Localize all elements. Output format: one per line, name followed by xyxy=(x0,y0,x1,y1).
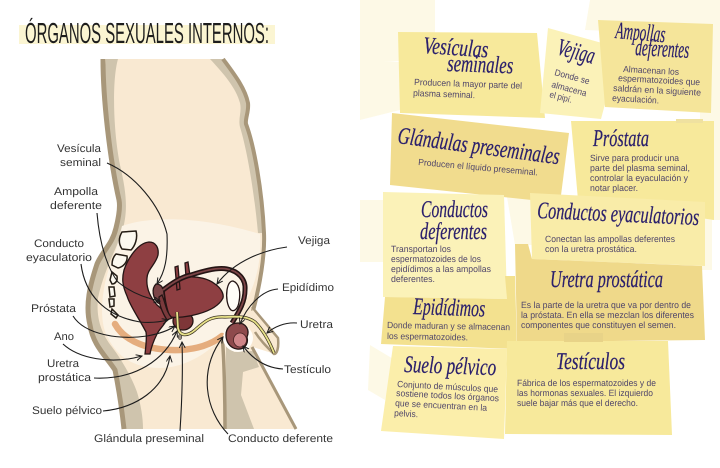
epididymis and testicle xyxy=(226,323,248,349)
note: Vesículas seminales: seminales xyxy=(447,51,514,79)
note: Vejiga: el pipí. xyxy=(548,89,573,105)
note: Vejiga xyxy=(540,28,620,119)
note: Vesículas seminales: plasma seminal. xyxy=(413,88,475,100)
diagram labels: seminal xyxy=(60,157,101,169)
note: Suelo pélvico: Conjunto de músculos que xyxy=(397,379,498,394)
white halo around testicle xyxy=(223,324,253,352)
title: ÓRGANOS SEXUALES INTERNOS: xyxy=(25,17,269,50)
body silhouette xyxy=(88,59,297,429)
prostate xyxy=(173,312,193,330)
diagram labels: Conducto deferente xyxy=(228,433,333,445)
diagram labels: Vejiga xyxy=(298,235,331,247)
note: Conductos deferentes: epidídimos a las ampollas xyxy=(391,264,491,274)
preseminal gland xyxy=(178,334,182,340)
right skin shadow band xyxy=(210,59,265,233)
ureter tubes xyxy=(175,266,180,290)
note: Testículos: las hormonas sexuales. El izquierdo xyxy=(517,388,653,398)
diagram labels: Uretra xyxy=(300,319,334,331)
note: Testículos: Testículos xyxy=(556,349,625,375)
note: Uretra prostática: Uretra prostática xyxy=(550,267,663,293)
note: Ampollas deferentes: espermatozoides que xyxy=(618,73,700,87)
note: Testículos: Fábrica de los espermatozoides y de xyxy=(517,378,656,388)
leg shadow xyxy=(226,343,259,429)
note: Próstata: Próstata xyxy=(592,126,649,152)
left skin outline xyxy=(88,59,124,429)
note: Suelo pélvico: pelvis. xyxy=(394,408,418,419)
pale background paper scraps xyxy=(360,0,720,400)
urethra xyxy=(177,312,274,353)
note: Suelo pélvico: sostiene todos los órganos xyxy=(396,388,500,403)
vas deferens tube xyxy=(163,268,245,323)
diagram labels: Testículo xyxy=(284,364,331,376)
rectum and anus xyxy=(123,242,167,354)
note: Vejiga: almacena xyxy=(550,79,588,98)
pelvic floor muscle xyxy=(115,324,222,350)
diagram labels: Suelo pélvico xyxy=(32,405,102,417)
diagram labels: Epidídimo xyxy=(282,282,334,294)
note: Uretra prostática: la próstata. En ella se mezclan los diferentes xyxy=(521,310,694,320)
note: Ampollas deferentes: saldrán en la siguiente xyxy=(613,83,701,98)
diagram labels: Vesícula xyxy=(57,143,102,155)
diagram labels xyxy=(26,143,334,445)
note: Vejiga: Vejiga xyxy=(554,35,598,70)
right skin outline xyxy=(223,59,264,311)
note: Epidídimos xyxy=(381,276,517,349)
note: Glándulas preseminales: Glándulas preseminales xyxy=(396,123,561,170)
note: Próstata: Sirve para producir una xyxy=(590,153,679,163)
note: Vejiga: Donde se xyxy=(553,67,591,86)
diagram labels: Glándula preseminal xyxy=(94,433,204,445)
diagram labels: prostática xyxy=(38,372,92,384)
note: Ampollas deferentes: Almacenan los xyxy=(623,64,680,77)
note: Suelo pélvico: Suelo pélvico xyxy=(404,352,497,381)
note: Próstata: controlar la eyaculación y xyxy=(590,173,688,183)
left skin shadow band xyxy=(88,59,143,429)
note: Uretra prostática xyxy=(515,244,705,342)
note: Próstata: notar placer. xyxy=(590,183,638,193)
hip bone xyxy=(227,281,240,311)
note: Glándulas preseminales: Producen el líquido preseminal. xyxy=(418,157,538,177)
diagram labels: Ampolla xyxy=(54,186,99,198)
note: Uretra prostática: componentes que constituyen el semen. xyxy=(521,320,676,330)
note: Vesículas seminales: Vesículas xyxy=(423,33,489,64)
sacrum vertebrae xyxy=(109,231,137,318)
note: Conductos deferentes: espermatozoides de los xyxy=(391,254,481,264)
note: Suelo pélvico xyxy=(381,346,507,439)
note: Epidídimos: los espermatozoides. xyxy=(387,331,468,342)
note: Ampollas deferentes: Ampollas xyxy=(613,18,667,48)
bladder xyxy=(164,277,223,317)
note: Ampollas deferentes: eyaculación. xyxy=(612,93,659,105)
note: Conductos deferentes: deferentes. xyxy=(391,274,435,284)
diagram labels: Conducto xyxy=(34,238,84,250)
note: Epidídimos: Donde maduran y se almacenan xyxy=(387,320,510,332)
scrotum pouch xyxy=(252,307,278,354)
pelvis light area xyxy=(102,219,260,368)
note: Testículos: suele bajar más que el derecho. xyxy=(517,398,638,408)
leg outlines xyxy=(222,337,225,429)
note: Testículos xyxy=(505,333,672,435)
note: Próstata xyxy=(571,119,714,220)
note: Epidídimos: Epidídimos xyxy=(412,294,486,323)
diagram labels: eyaculatorio xyxy=(26,252,92,264)
pointer lines xyxy=(107,163,167,284)
note: Vesículas seminales xyxy=(398,32,545,118)
note: Vesículas seminales: Producen la mayor parte del xyxy=(414,77,522,91)
note: Conductos eyaculatorios: Conectan las ampollas deferentes xyxy=(545,234,675,244)
note: Conductos eyaculatorios: con la uretra prostática. xyxy=(545,244,637,254)
diagram labels: Uretra xyxy=(47,358,80,370)
seminal vesicle xyxy=(153,284,165,304)
note: Glándulas preseminales xyxy=(390,113,569,203)
note: Conductos deferentes xyxy=(383,192,507,299)
anatomical diagram: body cross-section xyxy=(63,59,297,434)
note: Conductos deferentes: Transportan los xyxy=(391,244,451,254)
note: Ampollas deferentes xyxy=(598,18,713,113)
note: Conductos deferentes: Conductos xyxy=(421,197,488,223)
diagram labels: deferente xyxy=(50,200,102,212)
diagram labels: Próstata xyxy=(31,303,77,315)
note: Próstata: parte del plasma seminal, xyxy=(590,163,690,173)
note: Suelo pélvico: que se encuentran en la xyxy=(395,398,487,413)
note: Uretra prostática: Es la parte de la uretra que va por dentro de xyxy=(521,300,691,310)
title xyxy=(19,17,275,50)
diagram labels: Ano xyxy=(54,331,74,343)
note: Conductos eyaculatorios xyxy=(530,193,705,266)
note: Conductos deferentes: deferentes xyxy=(420,219,487,245)
